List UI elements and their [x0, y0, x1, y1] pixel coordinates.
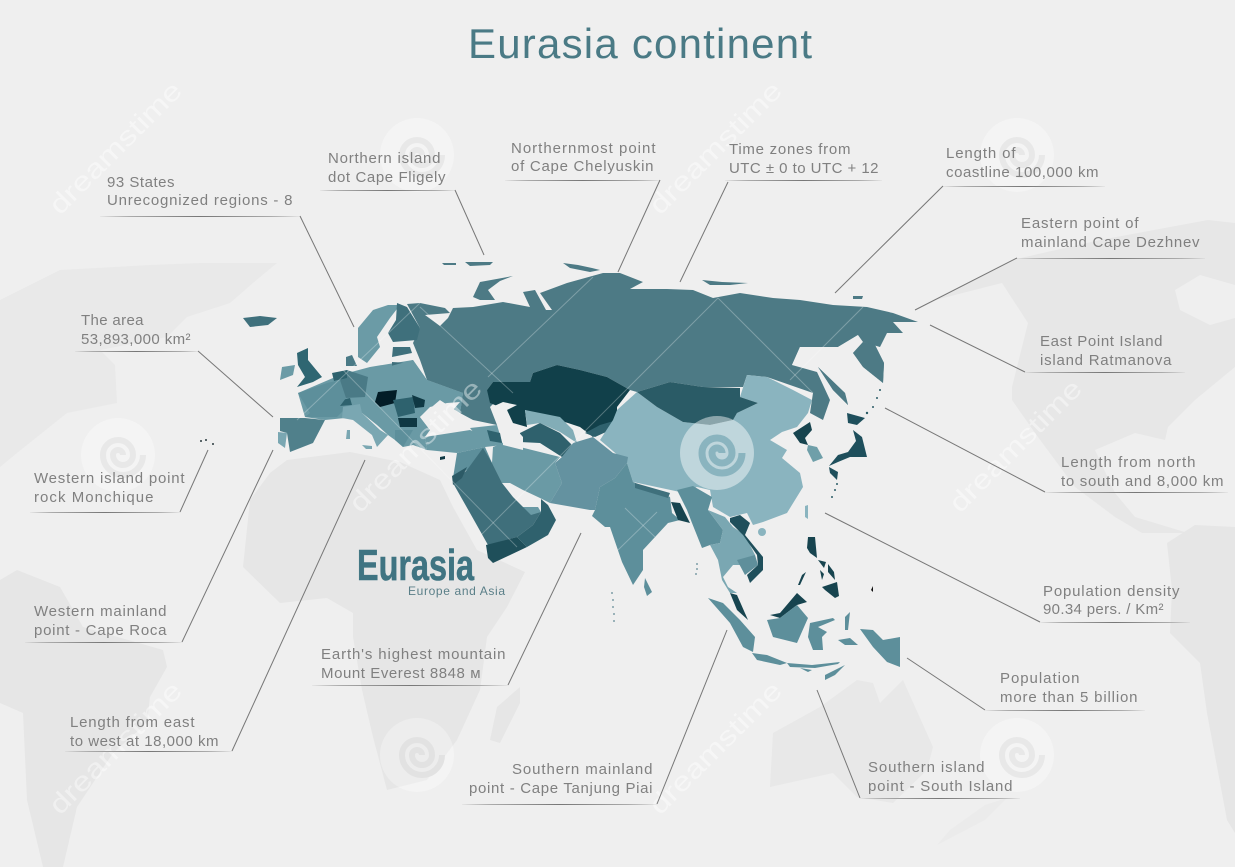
Bulgaria: [398, 418, 417, 427]
Azores: [200, 439, 214, 445]
Italy: [342, 404, 388, 447]
Kuril islands: [831, 389, 881, 498]
callout: highest mountain: [312, 533, 581, 686]
Germany and neighbours: [337, 370, 368, 398]
callout: coastline: [835, 145, 1105, 293]
Timor speck: [871, 586, 873, 592]
Madagascar: [490, 687, 520, 743]
Mongolia: [637, 382, 758, 425]
callout: southern mainland: [462, 630, 727, 805]
Caucasus: [487, 430, 502, 443]
Afghanistan and Pakistan: [550, 437, 628, 510]
Cyprus: [440, 456, 445, 460]
callout: northernmost point: [505, 140, 660, 272]
callout: eastern point: mainland Cape Dezhnev: [1021, 234, 1200, 251]
callout: highest mountain: Earth's highest mountain: [321, 646, 506, 663]
North America east view: [935, 220, 1235, 533]
Europe base: [298, 360, 463, 450]
callout: population density: [825, 513, 1190, 623]
callout: western mainland: [25, 450, 273, 643]
Baltic states: [392, 347, 412, 357]
watermark text: dreamstime: [643, 675, 788, 820]
callout: population: Population: [1000, 670, 1080, 687]
watermark lines: [297, 277, 863, 550]
callout: states: [100, 174, 354, 327]
Uzbekistan: [525, 410, 577, 443]
South America west view: [0, 570, 167, 867]
Ireland: [280, 365, 295, 380]
callout: southern mainland: point - Cape Tanjung Piai: [469, 780, 653, 797]
watermark text: dreamstime: [43, 675, 188, 820]
watermark text: dreamstime: [43, 75, 188, 220]
Saudi Arabia: [453, 448, 541, 545]
Turkey: [425, 430, 487, 453]
callout: area: [75, 312, 273, 417]
Indonesia: [708, 598, 900, 680]
world map backdrop: [0, 220, 1235, 867]
Bangladesh: [671, 502, 690, 523]
callout: northern island: Northern island: [328, 150, 441, 167]
callout: time zones: Time zones from: [729, 141, 851, 158]
Vietnam: [730, 515, 763, 583]
North America west view: [0, 263, 277, 467]
UAE: [523, 507, 541, 515]
Sardinia and Sicily: [346, 430, 372, 449]
Denmark: [346, 355, 357, 366]
Sakhalin: [818, 367, 848, 405]
callout: population: more than 5 billion: [1000, 689, 1138, 706]
watermark text: dreamstime: [943, 373, 1088, 518]
Syria and Jordan: [452, 467, 467, 485]
Iraq: [453, 447, 502, 483]
Norway and Sweden: [358, 305, 400, 363]
callout: population density: Population density: [1043, 583, 1180, 600]
callout: north to south length: to south and 8,000 km: [1061, 473, 1224, 490]
Romania: [393, 397, 415, 417]
callout: area: The area: [81, 312, 144, 329]
callout: northern island: [320, 150, 484, 255]
callout: northernmost point: of Cape Chelyuskin: [511, 158, 654, 175]
Cambodia: [737, 555, 758, 575]
Africa: [243, 452, 525, 790]
Taiwan and Hainan: [758, 505, 808, 536]
callout: eastern point: Eastern point of: [1021, 215, 1139, 232]
Nepal: [635, 483, 670, 498]
Netherlands: [332, 370, 347, 381]
watermark text: dreamstime: [643, 75, 788, 220]
callout: eastern point: [915, 215, 1205, 310]
callout: northern island: dot Cape Fligely: [328, 169, 446, 186]
callout: western island: Western island point: [34, 470, 185, 487]
Japan: [829, 413, 867, 480]
Belarus region: [392, 362, 410, 370]
Australia: [770, 680, 933, 803]
callout: western island: rock Monchique: [34, 489, 154, 506]
China: [600, 375, 812, 525]
callout: east point island: [930, 325, 1185, 373]
Novaya Zemlya: [473, 276, 513, 300]
callout: east to west length: Length from east: [70, 714, 195, 731]
callout: coastline: coastline 100,000 km: [946, 164, 1099, 181]
callout: east point island: island Ratmanova: [1040, 352, 1172, 369]
Greece: [395, 430, 413, 447]
callout: north to south length: [885, 408, 1228, 493]
watermark spirals: [81, 118, 1054, 792]
Finland: [388, 303, 420, 342]
Turkmenistan: [520, 423, 572, 457]
callout: western mainland: point - Cape Roca: [34, 622, 167, 639]
India: [592, 463, 680, 585]
South Korea: [807, 445, 823, 462]
callout: states: 93 States: [107, 174, 175, 191]
Spain: [280, 418, 325, 452]
callout: time zones: [680, 141, 882, 282]
New Zealand: [937, 798, 1007, 845]
callout: highest mountain: Mount Everest 8848 м: [321, 665, 481, 682]
Malaysia: [730, 593, 807, 620]
map: Eurasia countries: [200, 262, 918, 680]
Black Sea: [420, 402, 473, 430]
Hudson Bay: [1175, 275, 1235, 325]
callout: population density: 90.34 pers. / Km²: [1043, 601, 1164, 618]
Kyrgyzstan: [585, 420, 617, 437]
Gulf of Okhotsk: [792, 335, 883, 400]
callout: southern island: point - South Island: [868, 778, 1013, 795]
Philippines: [798, 537, 839, 598]
watermark text: dreamstime: [343, 373, 488, 518]
Portugal: [278, 432, 287, 448]
callout: southern mainland: Southern mainland: [512, 761, 653, 778]
callout: northernmost point: Northernmost point: [511, 140, 656, 157]
callout: southern island: [817, 690, 1020, 799]
United Kingdom: [297, 348, 322, 387]
callout: population: [907, 658, 1145, 711]
Russia: [407, 273, 918, 425]
callout: western island: [30, 450, 208, 513]
Moldova: [412, 395, 425, 408]
map wordmark: Eurasia: [357, 541, 474, 590]
Thailand and Laos: [708, 510, 755, 593]
Andaman and Maldives: [611, 563, 698, 622]
callout: coastline: Length of: [946, 145, 1016, 162]
callout: southern island: Southern island: [868, 759, 985, 776]
North Korea: [793, 422, 812, 445]
callout: area: 53,893,000 km²: [81, 331, 191, 348]
Caucasus base: [470, 425, 503, 447]
Iran: [492, 443, 562, 503]
callout: east to west length: to west at 18,000 km: [70, 733, 219, 750]
callout: time zones: UTC ± 0 to UTC + 12: [729, 160, 879, 177]
title: Eurasia continent: [468, 20, 812, 67]
Iceland: [243, 316, 277, 327]
Kazakhstan: [487, 365, 630, 437]
Myanmar: [677, 486, 723, 548]
callout: states: Unrecognized regions - 8: [107, 192, 293, 209]
callout: east to west length: [65, 460, 365, 752]
France: [298, 380, 347, 417]
Sri Lanka: [644, 578, 652, 596]
Caspian Sea: [492, 402, 523, 450]
South America east view: [1167, 525, 1235, 833]
Poland and Ukraine: [362, 360, 463, 413]
callout: east point island: East Point Island: [1040, 333, 1163, 350]
Yemen: [486, 537, 527, 563]
watermark text: [43, 75, 1088, 820]
callout: north to south length: Length from north: [1061, 454, 1196, 471]
callout: western mainland: Western mainland: [34, 603, 167, 620]
map wordmark: Europe and Asia: [408, 584, 505, 598]
Slovakia and Hungary: [375, 390, 397, 407]
Arctic islands: [442, 262, 863, 299]
Kamchatka: [853, 342, 884, 383]
Serbia and the Balkans: [375, 407, 398, 433]
Oman: [517, 499, 556, 547]
Switzerland and Austria: [338, 398, 352, 406]
